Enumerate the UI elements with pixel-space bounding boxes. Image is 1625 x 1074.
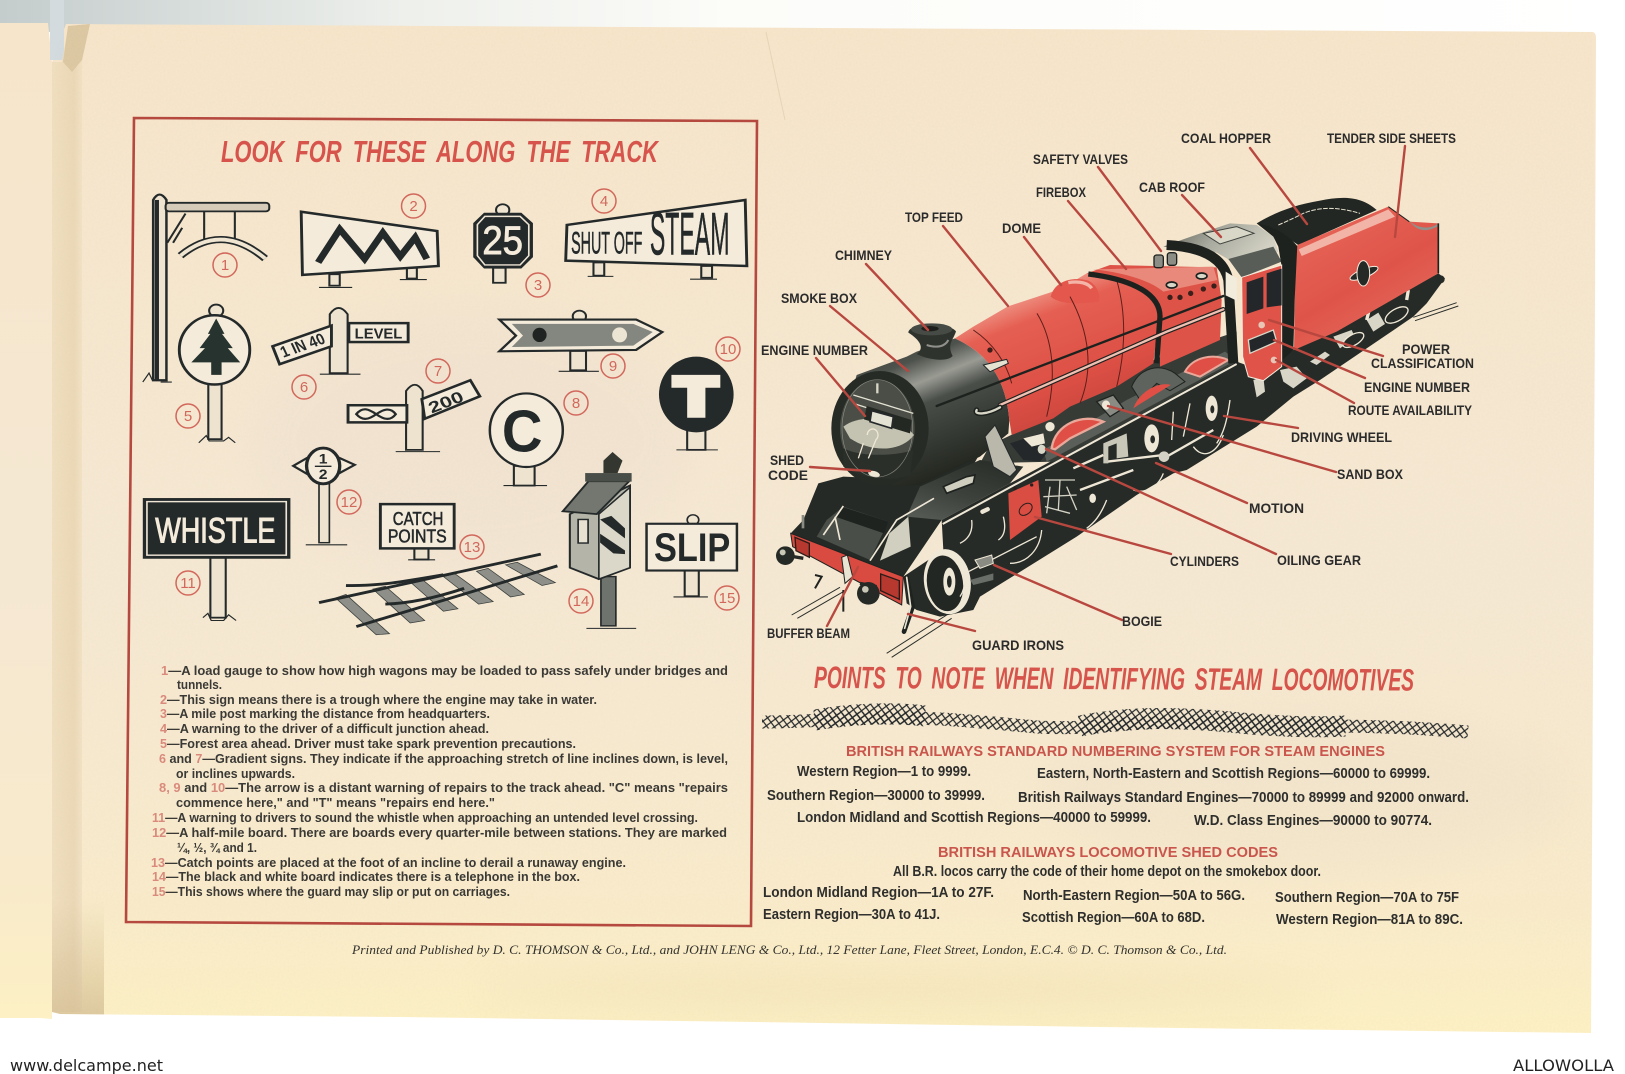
heading: look for these along the track: LOOK FOR THESE ALONG THE TRACK (221, 134, 660, 169)
numbering system block: British Railways Standard Engines—70000 to 89999 and 92000 onward. (1018, 790, 1469, 806)
numbering system block: Southern Region—30000 to 39999. (767, 788, 985, 804)
cab side (1242, 265, 1282, 381)
locomotive part labels: COAL HOPPER (1181, 130, 1271, 146)
locomotive part labels: SMOKE BOX (781, 290, 858, 306)
sign 6: 1 in 40 / level: LEVEL (355, 326, 402, 342)
shed codes block: Southern Region—70A to 75F (1275, 890, 1459, 906)
numbering system block: London Midland and Scottish Regions—40000 to 59999. (797, 810, 1151, 826)
dome (1051, 279, 1099, 303)
locomotive part labels: BUFFER BEAM (767, 625, 850, 641)
cab and tender rear section (1163, 198, 1445, 381)
sign 4: shut off steam (566, 199, 747, 279)
smoke box (843, 338, 1055, 487)
locomotive part labels: CODE (768, 467, 808, 483)
circled sign numbers: 8 (572, 395, 580, 412)
circled sign numbers: 13 (464, 539, 480, 556)
locomotive part labels: SAND BOX (1337, 466, 1404, 482)
leader lines (810, 146, 1405, 631)
circled sign numbers: 5 (184, 408, 192, 425)
locomotive part labels: CLASSIFICATION (1371, 355, 1474, 371)
locomotive part labels: TENDER SIDE SHEETS (1327, 130, 1456, 146)
locomotive part labels: ROUTE AVAILABILITY (1348, 402, 1473, 418)
locomotive part labels: SAFETY VALVES (1033, 151, 1128, 167)
smoke deflector (985, 425, 1017, 477)
notes text list: 14—The black and white board indicates there is a telephone in the box. (152, 869, 580, 884)
notes text list: 2—This sign means there is a trough where the engine may take in water. (160, 692, 597, 707)
sign 12: half-mile board: 1 (319, 452, 328, 467)
locomotive part labels: GUARD IRONS (972, 637, 1064, 653)
notes text list: or inclines upwards. (176, 766, 295, 781)
notes text list: 1—A load gauge to show how high wagons may be loaded to pass safely under bridges and (161, 663, 728, 678)
circled sign numbers: 7 (434, 363, 442, 380)
sign 8: repairs commence C (490, 393, 563, 486)
underframe and running gear (903, 273, 1445, 617)
notes text list: 4—A warning to the driver of a difficult junction ahead. (160, 721, 489, 736)
sign 12: half-mile board (293, 448, 355, 545)
driving wheels and motion (960, 396, 1230, 597)
sign 3: mile post 25: 25 (482, 219, 523, 263)
sign 13: catch points and track: CATCH (393, 509, 443, 529)
firebox (1087, 265, 1222, 367)
circled sign numbers: 1 (221, 257, 229, 274)
british railways emblem (1348, 261, 1380, 286)
notes text list: 8, 9 and 10—The arrow is a distant warning of repairs to the track ahead. "C" means "repairs (159, 780, 728, 795)
locomotive part labels: CHIMNEY (835, 247, 893, 263)
sand box (1097, 395, 1123, 417)
circled sign numbers: 2 (409, 198, 418, 215)
circled sign numbers: 9 (609, 358, 617, 375)
sign 9: distant warning arrow (499, 311, 662, 371)
circled sign numbers: 10 (720, 341, 736, 358)
sign 4: shut off steam: SHUT OFF (571, 226, 642, 261)
locomotive part labels: BOGIE (1122, 613, 1162, 629)
notes text list: commence here," and "T" means "repairs end here." (176, 795, 495, 810)
notes text list: 3—A mile post marking the distance from headquarters. (160, 706, 490, 721)
panel frame (126, 118, 757, 926)
locomotive part labels: ENGINE NUMBER (1364, 379, 1470, 395)
coal (1257, 198, 1377, 245)
locomotive part labels: TOP FEED (905, 209, 963, 225)
sign 5: forest (179, 305, 250, 443)
circled sign numbers: 14 (573, 593, 589, 610)
sign 6: 1 in 40 / level (273, 308, 408, 374)
notes text list: 15—This shows where the guard may slip or put on carriages. (152, 884, 510, 899)
circled sign numbers: 3 (534, 277, 542, 294)
handrails and feed pipes (937, 296, 1223, 413)
locomotive part labels: MOTION (1249, 500, 1304, 516)
shed codes block: Western Region—81A to 89C. (1276, 912, 1463, 928)
sign 13: catch points and track (319, 504, 557, 635)
chimney (908, 323, 956, 360)
circled sign numbers: 15 (719, 590, 735, 607)
publisher imprint: Printed and Published by D. C. THOMSON & Co., Ltd., and JOHN LENG & Co., Ltd., 12 Fetter Lane, Fleet Street, London, E.C.4. © D. C. Thomson & Co., Ltd. (351, 943, 1227, 957)
locomotive part labels: ENGINE NUMBER (761, 342, 868, 358)
locomotive part labels: CYLINDERS (1170, 553, 1239, 569)
running plate edge (943, 364, 1237, 524)
notes text list: 6 and 7—Gradient signs. They indicate if the approaching stretch of line inclines down, is level, (159, 751, 728, 766)
numbering system block: W.D. Class Engines—90000 to 90774. (1194, 813, 1432, 829)
circled sign numbers: 4 (600, 193, 608, 210)
sign 13: catch points and track: POINTS (388, 527, 447, 547)
shed codes block: North-Eastern Region—50A to 56G. (1023, 888, 1245, 904)
shed codes heading: BRITISH RAILWAYS LOCOMOTIVE SHED CODES (938, 845, 1278, 861)
locomotive part labels: FIREBOX (1036, 184, 1087, 200)
shed codes block: Eastern Region—30A to 41J. (763, 907, 940, 923)
guard irons (904, 577, 913, 632)
locomotive part labels: POWER (1402, 341, 1450, 357)
shed codes block: Scottish Region—60A to 68D. (1022, 910, 1205, 926)
numbering heading: BRITISH RAILWAYS STANDARD NUMBERING SYSTEM FOR STEAM ENGINES (846, 744, 1385, 760)
notes text list: tunnels. (177, 677, 222, 692)
railway track (319, 554, 557, 635)
boiler (955, 273, 1160, 435)
sign 2: water trough (301, 212, 438, 287)
circled sign numbers: 12 (341, 494, 357, 511)
locomotive part labels: OILING GEAR (1277, 552, 1361, 568)
cab roof (1163, 223, 1282, 363)
shed codes block: All B.R. locos carry the code of their home depot on the smokebox door. (893, 864, 1321, 880)
sign 14: telephone box (563, 452, 636, 628)
notes text list: 5—Forest area ahead. Driver must take spark prevention precautions. (160, 736, 576, 751)
notes text list (151, 663, 728, 899)
sign 12: half-mile board: 2 (319, 468, 328, 483)
rails (792, 303, 1458, 657)
circled sign numbers (176, 189, 740, 613)
smoke box door (831, 371, 929, 486)
sign 3: mile post 25 (473, 204, 533, 283)
locomotive part labels: CAB ROOF (1139, 179, 1205, 195)
shed codes block: London Midland Region—1A to 27F. (763, 885, 994, 901)
tender side (1294, 207, 1445, 350)
notes text list: ¼, ½, ¾ and 1. (177, 840, 257, 855)
notes text list: 11—A warning to drivers to sound the whistle when approaching an untended level crossing. (152, 810, 698, 825)
locomotive part labels: DRIVING WHEEL (1291, 429, 1392, 445)
sign 7: level and 1 in 200: 200 (425, 388, 467, 417)
numbering system block: Western Region—1 to 9999. (797, 764, 971, 780)
text: STEAM (650, 199, 729, 267)
sign 6: 1 in 40 / level: 1 IN 40 (277, 330, 328, 361)
circled sign numbers: 11 (180, 575, 196, 592)
sign 11: whistle: WHISTLE (155, 512, 275, 551)
sign 1: load gauge (143, 195, 269, 382)
panel: look for these along the track (126, 118, 757, 926)
cylinder (1008, 480, 1042, 540)
locomotive illustration (776, 198, 1458, 657)
notes text list: 12—A half-mile board. There are boards every quarter-mile between stations. They are marked (152, 825, 727, 840)
front deck (791, 332, 1237, 577)
tender arch (1257, 223, 1304, 361)
cross-hatched wavy divider (762, 714, 1468, 732)
sign 15: slip: SLIP (654, 526, 730, 570)
safety valves (1154, 253, 1177, 268)
sign 10: repairs end T (659, 357, 734, 450)
locomotive part labels: DOME (1002, 220, 1041, 236)
sign 11: whistle (143, 498, 290, 621)
notes text list: 13—Catch points are placed at the foot of an incline to derail a runaway engine. (151, 855, 626, 870)
sign 15: slip (647, 515, 737, 597)
locomotive part labels: SHED (770, 452, 804, 468)
splashers (1052, 357, 1228, 449)
sign 7: level and 1 in 200 (348, 380, 480, 452)
bogie wheels (920, 546, 975, 617)
numbering system block (767, 744, 1469, 829)
signs illustration (143, 195, 747, 635)
sign 8: repairs commence C: C (502, 398, 542, 465)
shed codes block (763, 845, 1463, 928)
buffer beam and buffers (776, 533, 903, 612)
numbering system block: Eastern, North-Eastern and Scottish Regions—60000 to 69999. (1037, 766, 1430, 782)
locomotive part labels (761, 130, 1474, 653)
circled sign numbers: 6 (300, 379, 308, 396)
